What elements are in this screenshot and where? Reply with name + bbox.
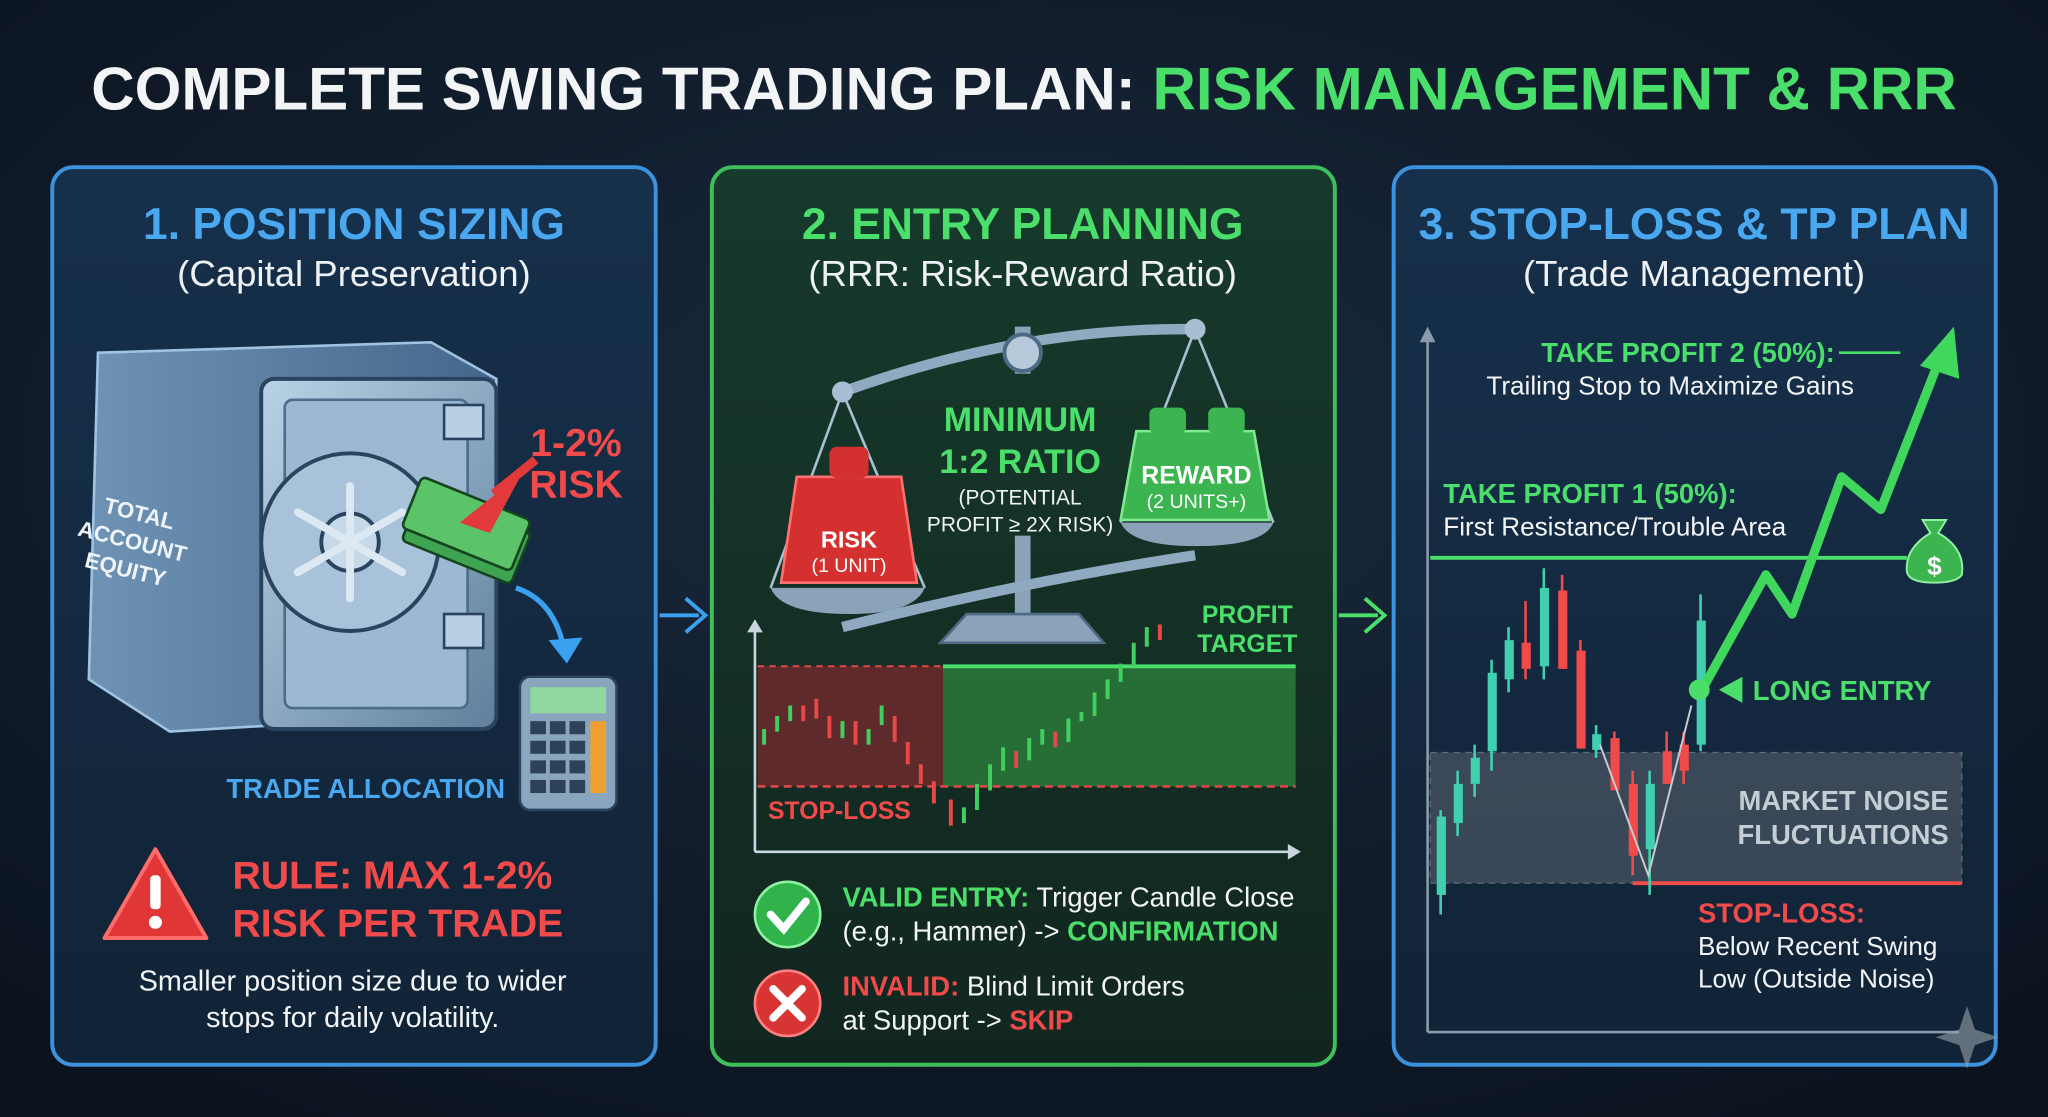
label: market noise xyxy=(1738,785,1949,850)
arrow: trend up xyxy=(1701,327,1959,692)
text: valid entry: (e.g., Hammer) -> CONFIRMATION xyxy=(842,916,1278,947)
label: 1-2% risk: RISK xyxy=(529,464,623,507)
note text: Smaller position size due to wider xyxy=(139,965,567,997)
icon: check xyxy=(755,882,820,947)
rule text: RULE: MAX 1-2% xyxy=(232,854,552,897)
label: profit target xyxy=(1197,602,1297,658)
label: profit target: TARGET xyxy=(1197,631,1297,658)
heading: position sizing: (Capital Preservation) xyxy=(177,253,531,294)
label: stop-loss: STOP-LOSS: xyxy=(1698,897,1865,928)
icon: risk weight xyxy=(781,447,917,583)
heading: stop-loss & tp: (Trade Management) xyxy=(1523,253,1865,294)
label: 1-2% risk: 1-2% xyxy=(530,422,622,465)
note text xyxy=(139,965,567,1034)
panel: position sizing xyxy=(52,167,656,1065)
heading: entry planning xyxy=(802,200,1243,294)
title: COMPLETE SWING TRADING PLAN: RISK MANAGEMENT & RRR xyxy=(91,56,1957,123)
label: stop-loss: Low (Outside Noise) xyxy=(1698,964,1934,994)
icon: money stack with red arrow xyxy=(402,460,536,584)
label: long entry: LONG ENTRY xyxy=(1753,675,1932,706)
icon: risk weight: RISK xyxy=(821,526,877,552)
label: 1-2% risk xyxy=(529,422,623,507)
icon: calculator xyxy=(520,677,616,810)
label: stop-loss: STOP-LOSS xyxy=(768,798,911,825)
heading: entry planning: 2. ENTRY PLANNING xyxy=(802,200,1243,249)
icon: reward weights: (2 UNITS+) xyxy=(1147,491,1246,513)
label: trade allocation: TRADE ALLOCATION xyxy=(226,773,505,804)
icon: money bag xyxy=(1907,520,1962,583)
rule text xyxy=(232,854,563,946)
label: take profit 2: TAKE PROFIT 2 (50%): xyxy=(1541,337,1835,368)
icon: risk weight: (1 UNIT) xyxy=(811,555,886,577)
chart: entry chart xyxy=(747,619,1301,860)
label: minimum 1:2 ratio: (POTENTIAL xyxy=(959,486,1082,509)
label: take profit 2: Trailing Stop to Maximize Gains xyxy=(1486,371,1854,401)
rule text: RISK PER TRADE xyxy=(232,903,563,946)
text: invalid entry xyxy=(842,970,1185,1035)
label: profit target: PROFIT xyxy=(1202,602,1293,629)
arrow: panel 1 to 2 xyxy=(660,598,705,632)
heading: position sizing: 1. POSITION SIZING xyxy=(143,200,565,249)
heading: entry planning: (RRR: Risk-Reward Ratio) xyxy=(808,253,1237,294)
arrow: panel 2 to 3 xyxy=(1339,598,1384,632)
icon: reward weights xyxy=(1121,408,1270,520)
icon: reward weights: REWARD xyxy=(1141,462,1252,489)
icon: sparkle xyxy=(1936,1006,1998,1069)
icon: safe: ACCOUNT xyxy=(76,516,190,567)
text: valid entry: VALID ENTRY: Trigger Candle Close xyxy=(842,882,1294,913)
label: take profit 1: First Resistance/Trouble Area xyxy=(1443,512,1787,542)
icon: safe: EQUITY xyxy=(82,547,169,591)
label: market noise: MARKET NOISE xyxy=(1739,785,1949,816)
label: minimum 1:2 ratio: MINIMUM xyxy=(944,401,1096,439)
icon: safe: TOTAL xyxy=(101,493,177,534)
note text: stops for daily volatility. xyxy=(206,1002,499,1034)
icon: balance scale xyxy=(771,319,1273,643)
label: take profit 1: TAKE PROFIT 1 (50%): xyxy=(1443,478,1737,509)
label: market noise: FLUCTUATIONS xyxy=(1738,819,1949,850)
arrow: to calculator xyxy=(516,588,583,664)
label: minimum 1:2 ratio: PROFIT ≥ 2X RISK) xyxy=(927,514,1113,537)
label: minimum 1:2 ratio: 1:2 RATIO xyxy=(939,443,1101,481)
label: minimum 1:2 ratio xyxy=(927,401,1113,537)
icon: safe xyxy=(69,342,496,732)
text: invalid entry: INVALID: Blind Limit Orders xyxy=(842,970,1185,1002)
label: stop-loss xyxy=(1698,897,1937,994)
text: valid entry xyxy=(842,882,1294,947)
heading: position sizing xyxy=(143,200,565,294)
text: invalid entry: at Support -> SKIP xyxy=(842,1004,1073,1035)
chart: trade management xyxy=(1420,327,1962,1032)
panel: stop-loss & tp plan xyxy=(1394,167,1996,1065)
label: stop-loss: Below Recent Swing xyxy=(1698,931,1937,961)
heading: stop-loss & tp: 3. STOP-LOSS & TP PLAN xyxy=(1419,200,1970,249)
panel: entry planning xyxy=(712,167,1335,1065)
icon: cross xyxy=(755,971,820,1036)
heading: stop-loss & tp xyxy=(1419,200,1970,294)
icon: money bag: $ xyxy=(1927,551,1942,581)
icon: warning xyxy=(104,849,206,938)
label: take profit 2 xyxy=(1486,337,1900,401)
label: take profit 1 xyxy=(1443,478,1787,542)
